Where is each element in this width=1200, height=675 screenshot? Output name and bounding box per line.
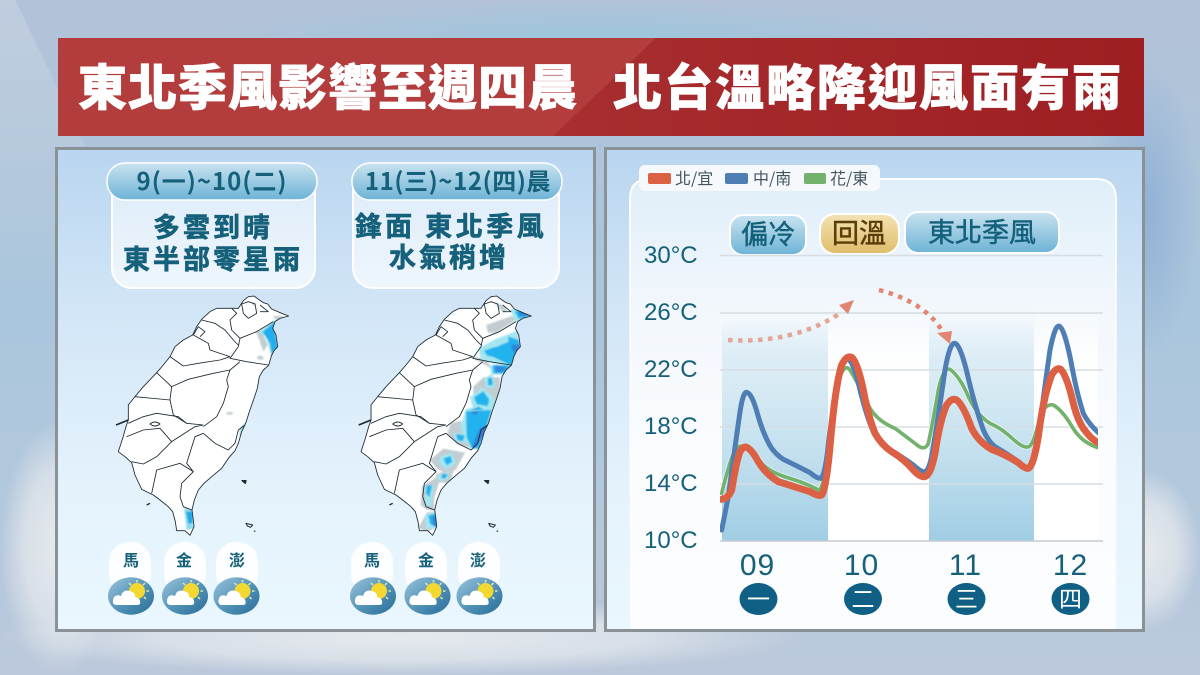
northern section — [464, 302, 530, 414]
title banner: 東北季風影響至週四晨 — [78, 49, 578, 120]
map: rain 11 to 12 — [359, 296, 533, 535]
y axis labels: 30°C — [644, 242, 698, 269]
shaded day bands — [722, 300, 1098, 541]
weather icons group: map one: 澎 — [229, 547, 245, 571]
line: 中南 blue — [722, 326, 1098, 530]
title banner — [58, 38, 1144, 136]
card: 11 to 12 forecast — [352, 162, 562, 288]
y axis labels: 10°C — [644, 527, 698, 554]
phase labels — [730, 211, 1059, 255]
x axis day labels — [740, 549, 1088, 582]
legend: 花/東 — [830, 165, 868, 189]
card: 11 to 12 forecast: 鋒面 東北季風 — [355, 205, 547, 244]
y axis labels: 22°C — [644, 356, 698, 383]
line: 花東 halo — [722, 368, 1098, 493]
card: 9 to 10 forecast: 多雲到晴 — [153, 206, 273, 245]
panel: rain maps — [56, 148, 596, 632]
y axis labels: 18°C — [644, 413, 698, 440]
southern section — [419, 410, 493, 533]
map: rain 9 to 10 — [116, 296, 289, 535]
weekday badges: 四 — [1059, 580, 1082, 614]
x axis day labels: 09 — [740, 549, 775, 582]
card: 11 to 12 forecast: 水氣稍增 — [389, 236, 509, 275]
y axis labels — [644, 242, 698, 554]
legend — [639, 165, 880, 191]
card: 9 to 10 forecast: 東半部零星雨 — [123, 238, 303, 277]
arrow: warming trend — [728, 300, 854, 340]
x axis day labels: 11 — [949, 549, 982, 582]
line chart: temperature curves — [722, 326, 1098, 530]
line: 北宜 red — [722, 357, 1098, 499]
legend: 中/南 — [753, 165, 791, 189]
card: 11 to 12 forecast: 11(三)~12(四)晨 — [365, 162, 551, 197]
card: 9 to 10 forecast — [107, 162, 317, 288]
weather icons group: map one — [108, 542, 260, 615]
weather icons group: map two: 金 — [418, 547, 434, 571]
weather icons group: map two: 馬 — [364, 547, 380, 571]
title banner: 北台溫略降迎風面有雨 — [613, 49, 1123, 120]
phase labels: 東北季風 — [928, 211, 1036, 250]
weekday badges: 一 — [747, 580, 770, 614]
phase labels: 偏冷 — [741, 213, 795, 252]
arrow: cooling trend — [879, 290, 952, 344]
weekday badges: 三 — [955, 580, 978, 614]
weather icons group: map two — [350, 542, 502, 615]
weather icons group: map one: 馬 — [123, 547, 139, 571]
weekday badges: 二 — [852, 580, 874, 614]
chart card background — [630, 179, 1116, 629]
card: 9 to 10 forecast: 9(一)~10(二) — [137, 162, 287, 197]
weekday badges — [740, 580, 1090, 615]
weather icons group: map two: 澎 — [470, 547, 486, 571]
weather icons group: map one: 金 — [176, 547, 192, 571]
y axis labels: 26°C — [644, 299, 698, 326]
line: 花東 green — [722, 368, 1098, 493]
legend: 北/宜 — [675, 165, 713, 189]
x axis day labels: 10 — [844, 549, 879, 582]
x axis day labels: 12 — [1053, 549, 1088, 582]
phase labels: 回溫 — [832, 212, 886, 251]
panel: temperature chart — [606, 148, 1145, 632]
y axis labels: 14°C — [644, 470, 698, 497]
